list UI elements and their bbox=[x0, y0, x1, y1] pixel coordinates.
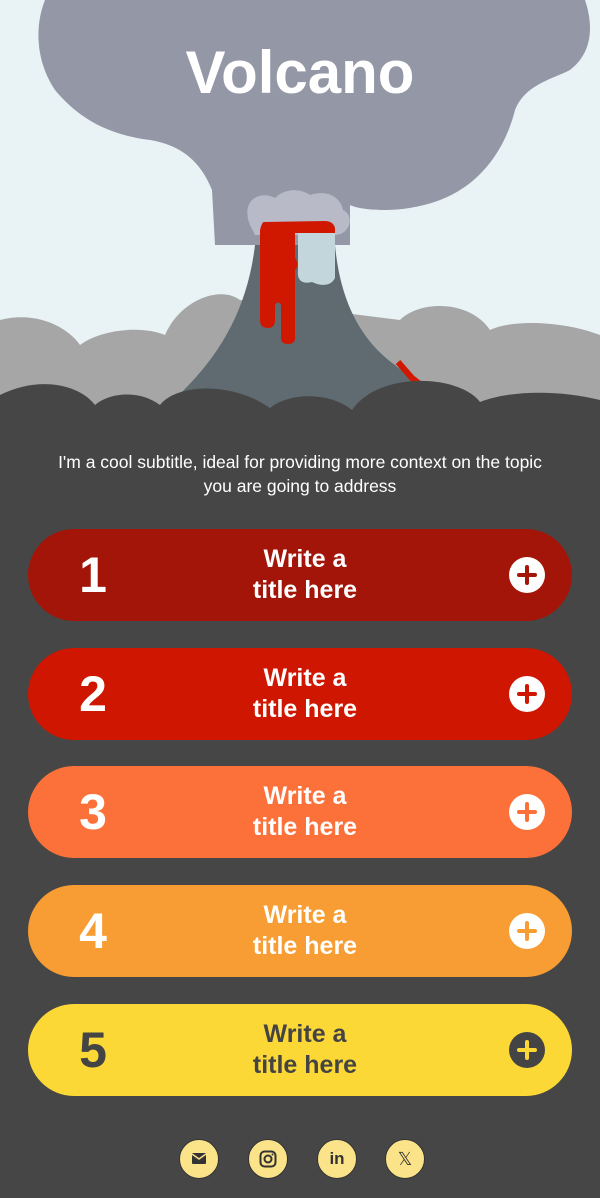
lava bbox=[260, 221, 335, 344]
icon: linkedin: in bbox=[329, 1149, 345, 1168]
button 3: Write a bbox=[264, 782, 346, 810]
icon: email bbox=[179, 1139, 219, 1179]
button 4: 4 bbox=[79, 903, 107, 959]
volcano body bbox=[150, 245, 445, 420]
button 5: 5 bbox=[79, 1022, 107, 1078]
button 2: 2 bbox=[79, 666, 107, 722]
button 4: title here bbox=[253, 932, 357, 960]
button 1: title here bbox=[253, 576, 357, 604]
illustration: volcano scene bbox=[0, 0, 600, 410]
icon: x: 𝕏 bbox=[398, 1149, 412, 1169]
button 3: 3 bbox=[79, 784, 107, 840]
icon: linkedin bbox=[317, 1139, 357, 1179]
button 2: title here bbox=[253, 695, 357, 723]
button 5: title here bbox=[253, 1051, 357, 1079]
button 1 bbox=[28, 529, 572, 621]
button 4: Write a bbox=[264, 901, 346, 929]
button 1: Write a bbox=[264, 545, 346, 573]
button 3 bbox=[28, 766, 572, 858]
subtitle: I'm a cool subtitle, ideal for providing more context on the topic you are going to address bbox=[58, 452, 542, 496]
title: Volcano bbox=[186, 39, 414, 106]
grey hills bbox=[0, 294, 600, 430]
button 4 bbox=[28, 885, 572, 977]
button 1: 1 bbox=[79, 547, 107, 603]
icon: x bbox=[385, 1139, 425, 1179]
button 5: Write a bbox=[264, 1020, 346, 1048]
icon: instagram bbox=[248, 1139, 288, 1179]
puff cloud bbox=[247, 190, 350, 285]
button 2: Write a bbox=[264, 664, 346, 692]
smoke cloud bbox=[38, 0, 590, 245]
dark hills bbox=[0, 381, 600, 430]
button 5 bbox=[28, 1004, 572, 1096]
button 2 bbox=[28, 648, 572, 740]
button 3: title here bbox=[253, 813, 357, 841]
